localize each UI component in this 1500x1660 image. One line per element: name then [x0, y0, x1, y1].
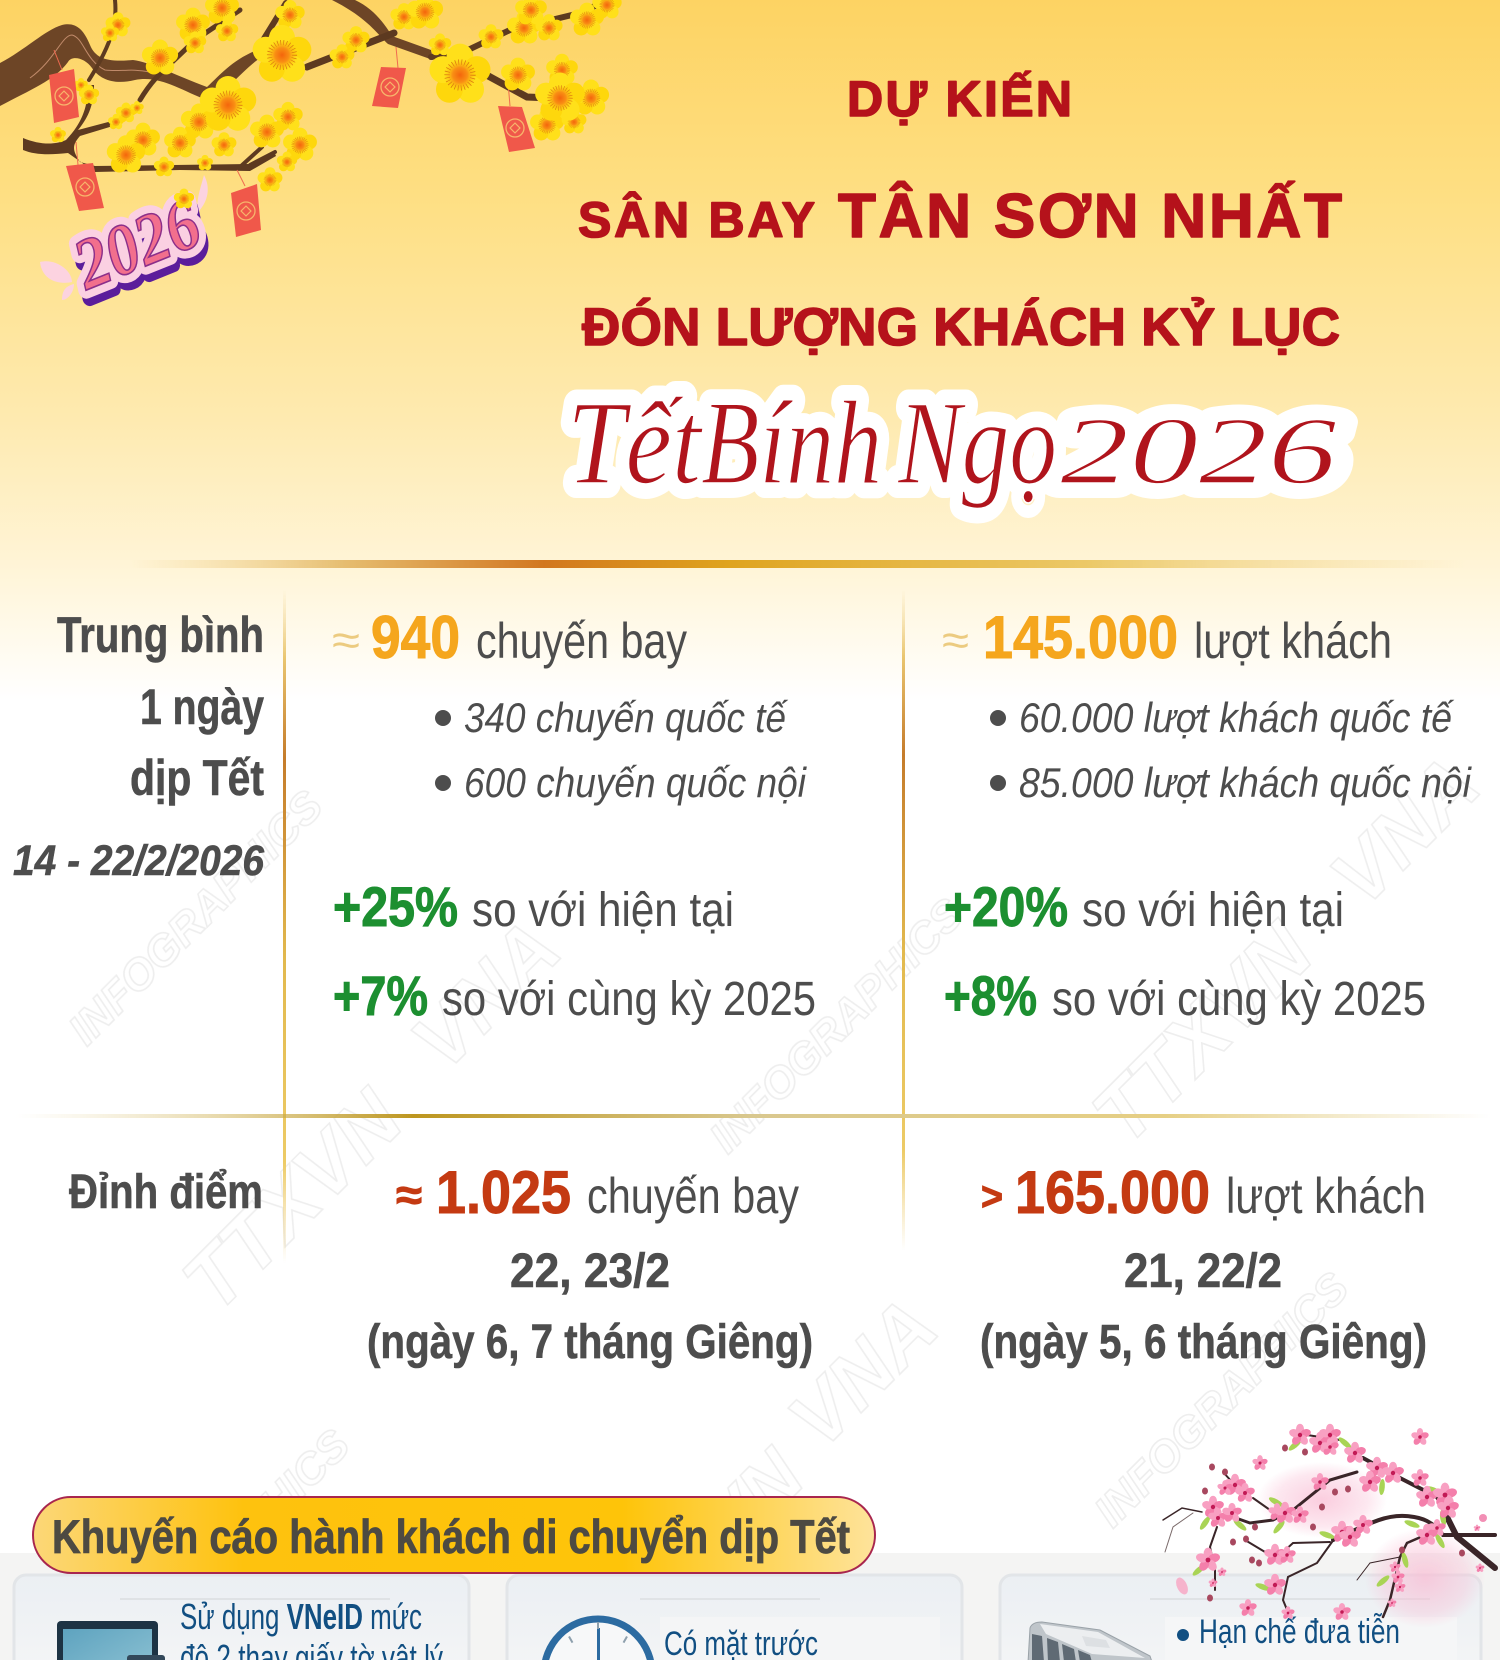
- panel: peak passengers: [980, 1159, 1427, 1369]
- passengers growth: +20%: [944, 875, 1068, 938]
- flights growth: [333, 875, 816, 1027]
- panel: peak flights: ≈: [396, 1171, 422, 1220]
- panel: peak flights: [367, 1159, 813, 1369]
- watermarks: TTXVN: [1075, 905, 1331, 1161]
- passengers headline: ≈: [942, 616, 969, 665]
- title line 3: ĐÓN LƯỢNG KHÁCH KỶ LỤC: [582, 297, 1340, 357]
- panel: peak passengers: 21, 22/2: [1124, 1245, 1282, 1298]
- script subtitle: Ngọ: [897, 376, 1057, 509]
- icon: clock: [544, 1619, 652, 1660]
- 2026 sticker: 2026: [62, 183, 211, 305]
- 2026 sticker: 2026: [65, 191, 215, 313]
- 2026 sticker: 2026: [62, 183, 211, 305]
- script subtitle: 2026: [1060, 397, 1337, 504]
- recommendation banner: [33, 1497, 875, 1573]
- passengers breakdown: 60.000 lượt khách quốc tế: [1019, 694, 1454, 741]
- flights headline: chuyến bay: [476, 613, 687, 669]
- watermarks: VNA: [1313, 739, 1496, 922]
- title line 1: DỰ KIẾN: [847, 71, 1072, 127]
- watermarks: INFOGRAPHICS: [1085, 1263, 1358, 1536]
- panel: card limit send-offs: [1000, 1575, 1481, 1660]
- row label: average per day: [13, 607, 265, 885]
- card text: Sử dụng VNeID mức: [180, 1596, 422, 1637]
- panel: card arrive early: [507, 1575, 962, 1660]
- peach blossom branch: [1163, 1424, 1495, 1628]
- icon: laptop: [57, 1621, 165, 1660]
- flights headline: [332, 604, 687, 671]
- panel: peak flights: 22, 23/2: [510, 1245, 670, 1298]
- panel: average passengers: [942, 604, 1472, 1027]
- script subtitle: Tết: [567, 376, 703, 509]
- watermarks: INFOGRAPHICS: [59, 781, 332, 1054]
- panel: peak flights: chuyến bay: [587, 1168, 799, 1224]
- icon: bus: [1027, 1622, 1158, 1660]
- panel: peak passengers: (ngày 5, 6 tháng Giêng): [980, 1316, 1427, 1369]
- panel: peak passengers: >: [981, 1175, 1003, 1219]
- row label: average per day: 1 ngày: [140, 679, 264, 735]
- passengers headline: 145.000: [983, 604, 1178, 671]
- row label: average per day: dịp Tết: [130, 750, 264, 806]
- panel: peak passengers: 165.000: [1015, 1159, 1210, 1226]
- panel: peak flights: 1.025: [436, 1159, 571, 1226]
- flights breakdown: [435, 694, 807, 806]
- passengers growth: +8%: [944, 964, 1037, 1027]
- panel: peak passengers: lượt khách: [1226, 1168, 1426, 1224]
- title line 2: SÂN BAY: [578, 192, 815, 248]
- column dividers: [15, 590, 1490, 1263]
- script subtitle: [567, 376, 1337, 509]
- row label: average per day: 14 - 22/2/2026: [13, 837, 265, 885]
- script subtitle: Tết: [567, 376, 703, 509]
- flights growth: +7%: [333, 964, 428, 1027]
- title line 2: [578, 182, 1342, 251]
- row label: peak: Đỉnh điểm: [69, 1166, 263, 1219]
- passengers headline: lượt khách: [1194, 613, 1392, 669]
- flights breakdown: 600 chuyến quốc nội: [464, 759, 807, 806]
- panel: peak flights: (ngày 6, 7 tháng Giêng): [367, 1316, 813, 1369]
- watermarks: INFOGRAPHICS: [700, 889, 973, 1162]
- gold divider: [130, 560, 1465, 568]
- watermarks: VNA: [394, 903, 577, 1086]
- script subtitle: Ngọ: [897, 376, 1057, 509]
- flights headline: ≈: [332, 616, 360, 665]
- passengers growth: so với cùng kỳ 2025: [1052, 973, 1426, 1026]
- passengers growth: [944, 875, 1426, 1027]
- panel: card VNeID: [14, 1575, 469, 1660]
- script subtitle: Bính: [701, 376, 882, 509]
- watermarks: [59, 739, 1496, 1660]
- flights breakdown: 340 chuyến quốc tế: [464, 694, 788, 741]
- row label: average per day: Trung bình: [57, 607, 264, 663]
- passengers headline: [942, 604, 1392, 671]
- flights headline: 940: [371, 604, 460, 671]
- card text: [180, 1596, 443, 1660]
- panel: average flights: [332, 604, 816, 1027]
- script subtitle: Bính: [701, 376, 882, 509]
- passengers growth: so với hiện tại: [1082, 884, 1344, 937]
- watermarks: TTXVN: [165, 1072, 421, 1328]
- recommendation banner: Khuyến cáo hành khách di chuyển dịp Tết: [52, 1510, 850, 1563]
- watermarks: VNA: [771, 1281, 954, 1464]
- flights growth: +25%: [333, 875, 458, 938]
- title: [567, 71, 1342, 509]
- flights growth: so với hiện tại: [472, 884, 734, 937]
- flights growth: so với cùng kỳ 2025: [442, 973, 816, 1026]
- card text: Hạn chế đưa tiễn: [1199, 1613, 1400, 1651]
- passengers breakdown: [990, 694, 1472, 806]
- apricot blossom branch with red envelopes: [0, 0, 622, 237]
- title line 2: TÂN SƠN NHẤT: [838, 182, 1342, 251]
- script subtitle: 2026: [1060, 397, 1337, 504]
